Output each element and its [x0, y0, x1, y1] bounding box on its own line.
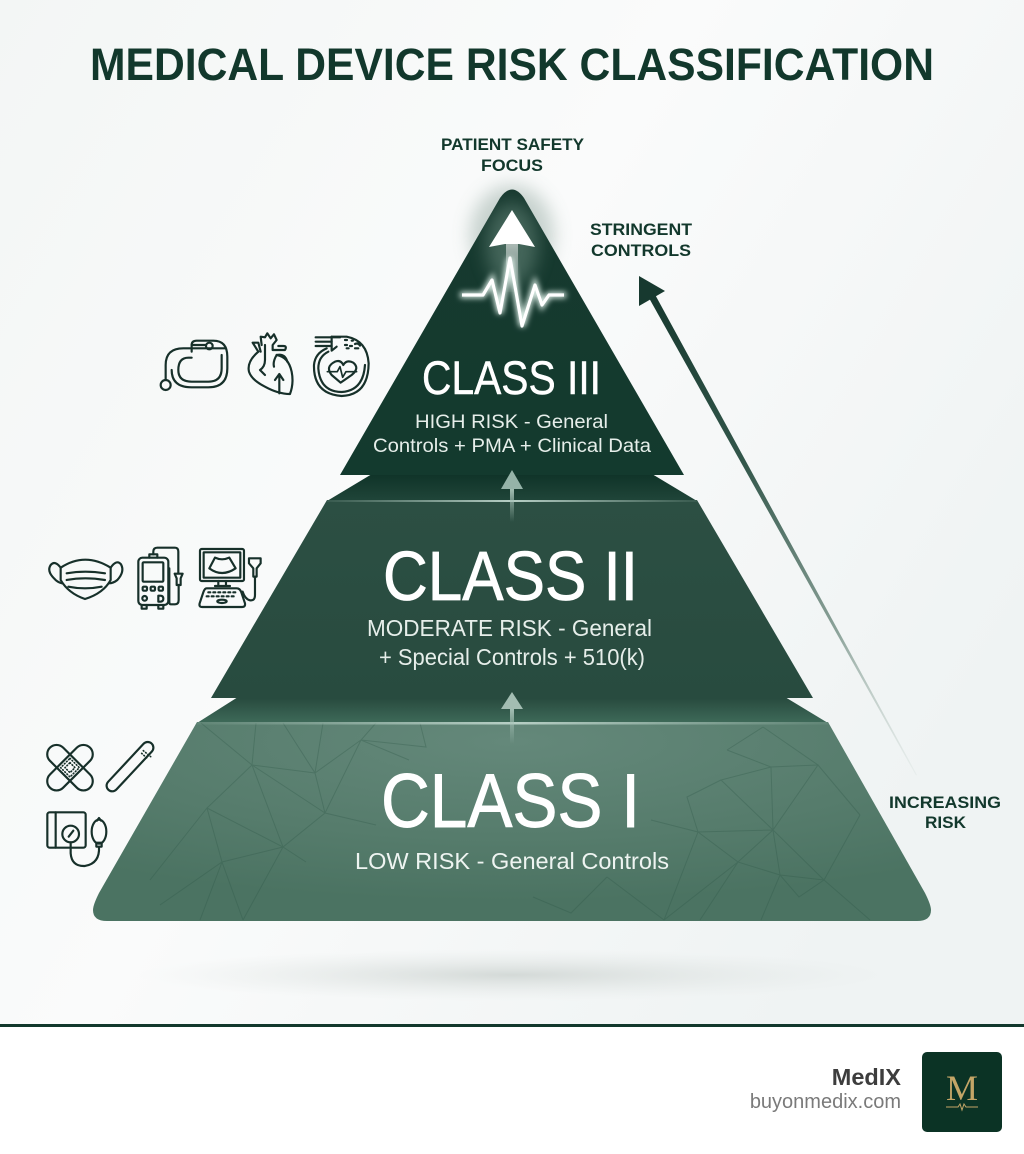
icons: class III devices [161, 333, 369, 396]
logo [922, 1052, 1002, 1132]
icons: class I devices [43, 740, 156, 866]
class I text: CLASS I [381, 759, 640, 844]
separator highlights [197, 500, 828, 724]
title: MEDICAL DEVICE RISK CLASSIFICATION [90, 39, 934, 90]
icon: pacemaker [161, 341, 227, 390]
class I text [355, 759, 669, 874]
label: increasing risk: INCREASING [889, 794, 1001, 812]
website: buyonmedix.com [750, 1091, 901, 1113]
label: patient safety focus: PATIENT SAFETY [441, 136, 584, 154]
arrow: class I to class II [501, 692, 523, 744]
class III text: HIGH RISK - General [415, 412, 608, 433]
label: increasing risk: RISK [925, 814, 966, 832]
class I text: LOW RISK - General Controls [355, 848, 669, 874]
icon: ultrasound machine [199, 549, 261, 607]
label: patient safety focus: FOCUS [481, 157, 543, 175]
icon: blood pressure cuff [47, 812, 106, 866]
apex glow and safety icon [460, 203, 566, 326]
tier: class I [93, 697, 931, 921]
icon: infusion pump [138, 548, 183, 609]
arrow: class II to class III [501, 470, 523, 522]
class II text: + Special Controls + 510(k) [379, 644, 645, 670]
class II text [367, 537, 652, 670]
label: stringent controls [590, 221, 692, 260]
class II text: CLASS II [383, 537, 638, 615]
label: patient safety focus [441, 136, 584, 175]
brand name: MedIX [832, 1064, 901, 1090]
label: stringent controls: STRINGENT [590, 221, 692, 239]
arrow: increasing risk [639, 276, 917, 776]
footer [0, 1024, 1024, 1154]
icon: face mask [49, 560, 122, 599]
tier: class II [211, 474, 813, 698]
icon: cross bandage [43, 741, 97, 794]
class III text: Controls + PMA + Clinical Data [373, 436, 651, 457]
label: stringent controls: CONTROLS [591, 242, 691, 260]
icon: heart [249, 333, 293, 394]
icon: plaster strip [104, 740, 156, 794]
icon: implantable device [314, 337, 369, 396]
class III text: CLASS III [422, 351, 601, 404]
tier: class III [340, 190, 684, 475]
ground shadow [137, 949, 887, 1001]
logo: M [946, 1068, 978, 1108]
class II text: MODERATE RISK - General [367, 615, 652, 641]
label: increasing risk [889, 794, 1001, 832]
apex halo [470, 185, 554, 285]
class III text [373, 351, 651, 457]
icons: class II devices [49, 548, 261, 609]
